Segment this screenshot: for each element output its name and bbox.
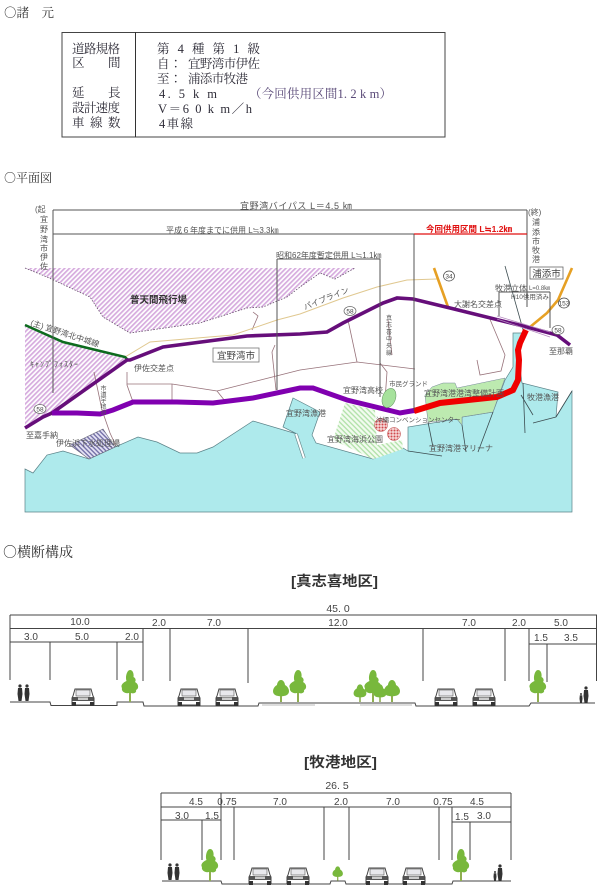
local roads <box>94 312 505 446</box>
dimension numbers: 3.5 <box>564 633 578 644</box>
pipeline <box>125 279 437 357</box>
map labels: 佐 <box>40 261 48 271</box>
orange roads <box>434 268 572 327</box>
panel: Makiminato cross-section <box>161 780 511 885</box>
map labels: 伊佐交差点 <box>134 363 174 373</box>
dimension numbers: 3.0 <box>24 632 38 643</box>
dimension numbers: 26. 5 <box>325 780 349 792</box>
text: specification labels: 数 <box>108 115 121 130</box>
map labels: 牧港漁港 <box>527 392 559 402</box>
route shields: 58 <box>36 406 44 414</box>
dimension numbers: 7.0 <box>386 797 400 808</box>
route shields: 34 <box>445 274 453 280</box>
trees <box>121 670 546 702</box>
dimension numbers: 4.5 <box>189 797 203 808</box>
map labels: 昭和62年度暫定供用 L≒1.1㎞ <box>276 250 381 260</box>
sea <box>25 333 572 512</box>
cars <box>72 689 495 706</box>
dimension numbers: 1.5 <box>534 633 548 644</box>
map labels: 宜野湾港マリーナ <box>429 443 493 453</box>
green prefectural road <box>25 325 128 360</box>
map labels: 普天間飛行場 <box>130 294 188 306</box>
heading: Mashiki district: [真志喜地区] <box>291 573 378 589</box>
dimension numbers: 1.5 <box>205 811 219 822</box>
sewage plant <box>70 429 115 459</box>
dimension numbers: 0.75 <box>217 797 237 808</box>
text: specification labels: 間 <box>108 56 121 70</box>
map labels <box>26 200 573 453</box>
map labels: 至那覇 <box>549 347 573 356</box>
heading: plan view: ○平面図 <box>4 169 52 186</box>
map labels: (主) 宜野湾北中城線 <box>29 317 101 349</box>
seaside park <box>333 403 403 459</box>
heading: Makiminato district: [牧港地区] <box>304 754 377 770</box>
map labels: 港 <box>532 254 540 264</box>
dimension numbers: 45. 0 <box>326 603 350 615</box>
label box: Ginowan city: 宜野湾市 <box>217 350 255 362</box>
dimension numbers: 7.0 <box>273 797 287 808</box>
dimension numbers: 12.0 <box>328 618 348 629</box>
camp foster zone <box>25 325 128 428</box>
dimension numbers: 4.5 <box>470 797 484 808</box>
text: specification values: V＝6 0 k m／h <box>158 102 253 116</box>
map labels: 平成６年度までに供用 L≒3.3㎞ <box>166 225 279 235</box>
route 58 <box>25 298 570 428</box>
dimension numbers: 7.0 <box>462 618 476 629</box>
pedestrians <box>18 684 588 703</box>
overpass marker <box>497 316 550 337</box>
map labels: 線 <box>386 349 392 357</box>
park ground oval <box>379 386 399 410</box>
text: specification values: 第 4 種 第 1 級 <box>157 42 260 56</box>
map labels: 宜野湾海浜公園 <box>327 434 383 444</box>
route shields: 58 <box>554 328 562 334</box>
text: specification labels: 道路規格 <box>72 41 120 56</box>
text: specification values: 4車線 <box>159 117 193 131</box>
text: specification labels: 区 <box>72 56 85 70</box>
text: specification labels: 車 <box>72 116 85 130</box>
map labels: 添 <box>532 227 540 237</box>
dimension numbers: 1.5 <box>455 812 469 823</box>
map labels: 真 <box>386 314 392 322</box>
dimension numbers: 0.75 <box>433 797 453 808</box>
dimension numbers: 2.0 <box>512 618 526 629</box>
panel: Mashiki cross-section <box>10 603 597 706</box>
text: specification labels: 長 <box>108 86 121 100</box>
map labels: 野 <box>40 225 48 234</box>
dimension numbers: 5.0 <box>554 618 568 629</box>
dimension numbers <box>175 780 491 823</box>
pedestrians <box>168 863 502 881</box>
label box: Ginowan city <box>213 348 259 362</box>
text: specification labels: 設計速度 <box>72 100 120 115</box>
convention center circles <box>374 418 400 440</box>
map labels: 中 <box>386 335 392 343</box>
dimension numbers: 3.0 <box>477 811 491 822</box>
map labels: ｷｬﾝﾌﾟﾌｫｽﾀｰ <box>30 360 79 369</box>
text: specification values: 自： <box>157 57 182 71</box>
dimension numbers: 2.0 <box>334 797 348 808</box>
route shields: 153 <box>559 300 570 308</box>
map labels: 伊 <box>40 252 48 262</box>
harbor improvement plan <box>425 378 505 425</box>
trees <box>201 849 469 881</box>
map labels: 喜 <box>386 328 392 336</box>
text: specification values: 至： <box>157 72 182 86</box>
dimension numbers: 2.0 <box>152 618 166 629</box>
map labels: 宜野湾バイパス L＝4.5 ㎞ <box>240 200 352 211</box>
map labels: 宜 <box>40 215 48 224</box>
dimension numbers: 2.0 <box>125 632 139 643</box>
map labels: 浦 <box>532 217 540 227</box>
text: specification values: 浦添市牧港 <box>188 71 248 86</box>
text: specification labels <box>72 41 121 130</box>
airport zone <box>25 268 355 333</box>
map labels: 大謝名交差点 <box>454 299 502 309</box>
road profile <box>10 702 595 706</box>
dimension grid <box>10 615 597 683</box>
dimension numbers: 5.0 <box>75 632 89 643</box>
map labels: 市 <box>40 243 48 253</box>
map labels: H10供用済み <box>511 292 549 301</box>
map labels: 牧 <box>532 245 540 255</box>
bypass section opened this time <box>414 330 526 411</box>
text: specification labels: 延 <box>72 86 85 100</box>
map labels: 宜野湾高校 <box>343 385 383 395</box>
text: specification values: 宜野湾市伊佐 <box>188 56 260 71</box>
map labels: (起 <box>35 205 46 214</box>
breakwater <box>296 434 304 458</box>
map labels: 央 <box>386 342 392 350</box>
dimension numbers: 7.0 <box>207 618 221 629</box>
dimension lines <box>53 210 550 410</box>
map labels: L=0.8㎞ <box>529 285 550 292</box>
map labels: 市 <box>532 236 540 246</box>
map labels: 伊佐浜下水処理場 <box>56 438 120 448</box>
dimension grid <box>161 793 511 860</box>
map labels: (終) <box>528 207 542 217</box>
map labels: 市民グランド <box>389 379 428 388</box>
route shields: 58 <box>346 308 354 316</box>
label box: Urasoe city: 浦添市 <box>532 268 561 280</box>
route shields <box>34 271 570 414</box>
cars <box>249 868 425 885</box>
map labels: 沖縄コンベンションセンター <box>376 415 460 424</box>
panel: specification table <box>62 32 445 137</box>
map labels: 宜野湾漁港 <box>286 408 326 418</box>
text: specification labels: 線 <box>90 116 103 130</box>
heading: specifications: ○諸 元 <box>4 3 55 21</box>
bypass route existing <box>52 388 417 414</box>
dimension numbers <box>24 603 578 644</box>
map labels: パイプライン <box>302 286 350 312</box>
map labels: 志 <box>386 321 392 329</box>
text: specification values: （今回供用区間1. 2 k m） <box>249 86 392 101</box>
heading: cross-section: ○横断構成 <box>3 542 73 562</box>
dimension numbers: 10.0 <box>70 617 90 628</box>
panel: plan map <box>25 200 573 512</box>
dark harbor lines <box>408 266 572 456</box>
text: specification values <box>157 42 392 131</box>
map labels: 宜野湾港港湾整備計画 <box>424 388 504 398</box>
dimension numbers: 3.0 <box>175 811 189 822</box>
map labels: 今回供用区間 L≒1.2㎞ <box>426 224 513 234</box>
map labels: 至嘉手納 <box>26 430 58 440</box>
map labels: 湾 <box>40 234 48 244</box>
map labels: 牧港立体 <box>495 283 527 293</box>
road profile <box>162 881 511 884</box>
text: specification values: 4. 5 k m <box>159 87 217 101</box>
map labels: 市道宇地泊 <box>99 384 106 416</box>
